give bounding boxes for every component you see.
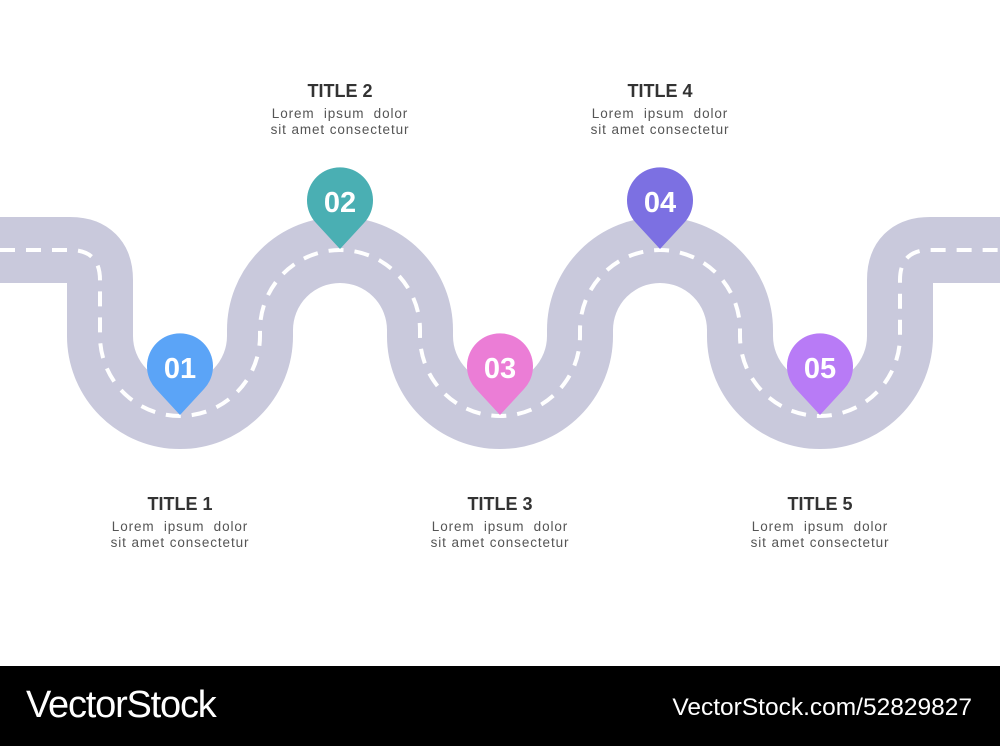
text: title 4: Lorem ipsum dolor [592,106,728,121]
footer logo: VectorStock [26,684,216,726]
pin 03 [467,333,533,415]
text: title 4: sit amet consectetur [591,122,729,137]
text: title 1 [111,494,249,550]
text: title 2: sit amet consectetur [271,122,409,137]
road [0,250,1000,416]
text: title 1: TITLE 1 [147,494,212,514]
pin 01 [147,333,213,415]
text: title 1: sit amet consectetur [111,535,249,550]
text: title 2 [271,81,409,137]
text: title 2: TITLE 2 [307,81,372,101]
pin 05: 05 [804,353,836,385]
pin 01: 01 [164,353,196,385]
pin 04 [627,167,693,249]
pin 03: 03 [484,353,516,385]
text: title 3: TITLE 3 [467,494,532,514]
text: title 4 [591,81,729,137]
pin 02: 02 [324,187,356,219]
text: title 5 [751,494,889,550]
text: title 1: Lorem ipsum dolor [112,519,248,534]
footer bar [0,666,1000,746]
text: title 5: sit amet consectetur [751,535,889,550]
text: title 4: TITLE 4 [627,81,692,101]
text: title 5: Lorem ipsum dolor [752,519,888,534]
pin 05 [787,333,853,415]
pin 02 [307,167,373,249]
pin 04: 04 [644,187,676,219]
text: title 5: TITLE 5 [787,494,852,514]
text: title 2: Lorem ipsum dolor [272,106,408,121]
text: title 3 [431,494,569,550]
footer id: VectorStock.com/52829827 [672,694,972,721]
text: title 3: Lorem ipsum dolor [432,519,568,534]
text: title 3: sit amet consectetur [431,535,569,550]
